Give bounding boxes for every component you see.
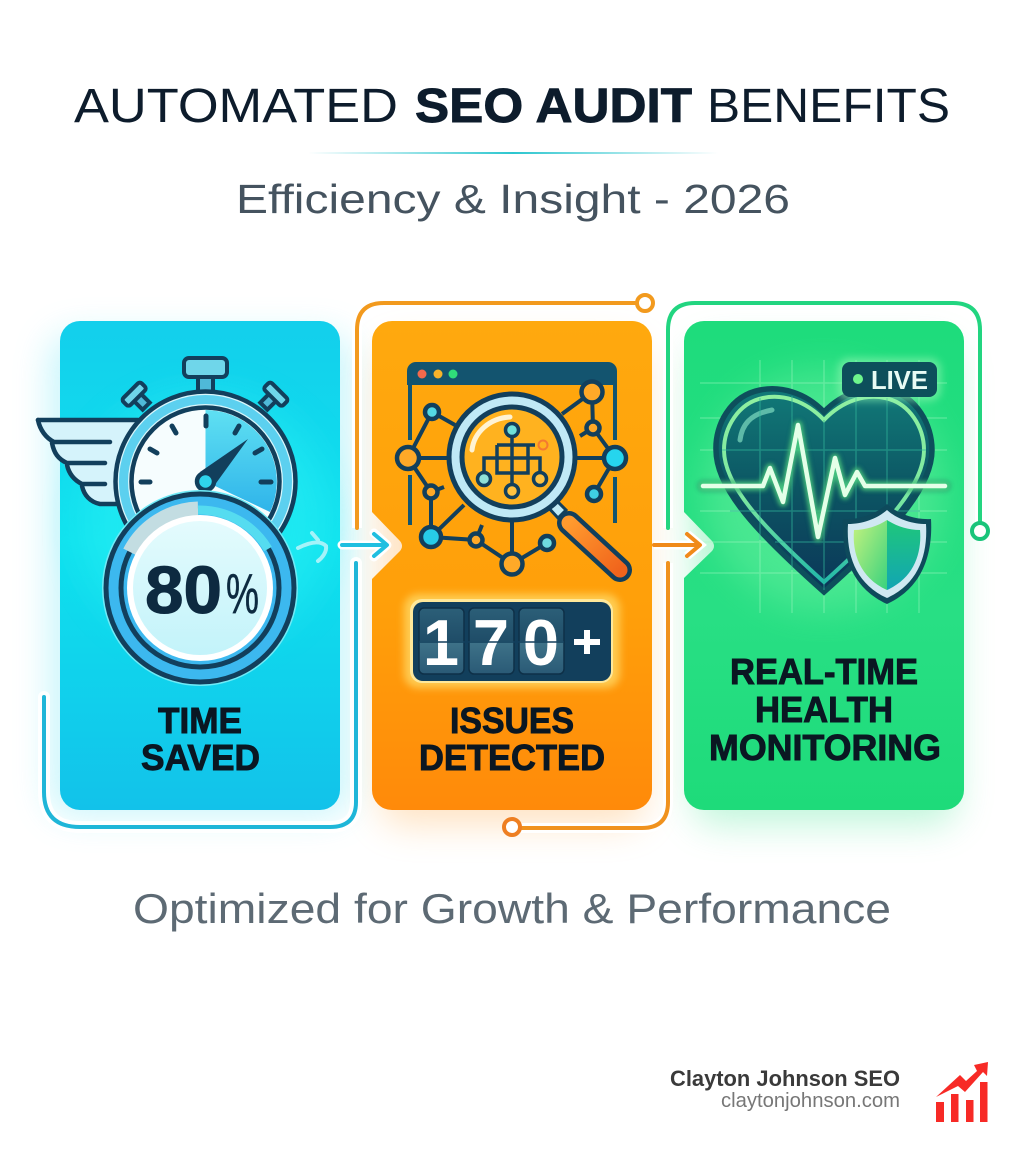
counter 170+: 0: [523, 606, 559, 679]
credit text: Clayton Johnson SEO: [670, 1066, 900, 1091]
panel glows: [50, 335, 957, 825]
connector: orange upper: [357, 295, 653, 528]
tagline: Optimized for Growth & Performance: [133, 885, 891, 932]
title: BENEFITS: [707, 80, 950, 133]
icon: logo chart: [936, 1062, 988, 1122]
label: real-time health monitoring: HEALTH: [755, 689, 893, 730]
label: issues detected: [419, 700, 605, 778]
80 percent dial: [102, 490, 298, 686]
connector: orange lower: [504, 534, 700, 835]
80 percent value: %: [226, 562, 259, 626]
label: real-time health monitoring: MONITORING: [709, 727, 941, 768]
background grid: [700, 360, 947, 613]
stopwatch ticks: [141, 416, 271, 482]
icon: heart with pulse: [703, 389, 945, 592]
panel: time saved: [38, 321, 340, 810]
stopwatch body: [116, 392, 296, 572]
counter 170+: [404, 594, 620, 688]
counter 170+: 7: [473, 606, 509, 679]
graph edges: [408, 392, 615, 564]
connector: green: [668, 303, 988, 539]
label: time saved: TIME: [158, 700, 242, 741]
pulse line: [703, 425, 945, 537]
label: issues detected: ISSUES: [450, 700, 574, 741]
graph nodes: [397, 382, 626, 574]
tree inside lens: [478, 424, 548, 498]
browser frame: [407, 362, 617, 525]
connector: blue: [44, 533, 387, 827]
stopwatch hand: [197, 439, 248, 490]
credit text: claytonjohnson.com: [721, 1090, 900, 1112]
label: issues detected: DETECTED: [419, 737, 605, 778]
heart grid: [722, 396, 926, 590]
icon: winged stopwatch: [38, 358, 298, 686]
badge: live: LIVE: [871, 365, 928, 395]
stopwatch buttons: [121, 358, 289, 415]
faded arrow: [298, 533, 326, 561]
stopwatch glow: [80, 395, 330, 645]
label: time saved: SAVED: [141, 737, 260, 778]
label: time saved: [141, 700, 260, 778]
80 percent value: [145, 553, 259, 628]
panel: issues detected: [372, 321, 652, 810]
80 percent value: 80: [145, 553, 222, 628]
icon: shield: [843, 504, 931, 604]
label: real-time health monitoring: REAL-TIME: [730, 651, 918, 692]
title: SEO AUDIT: [415, 80, 692, 133]
label: real-time health monitoring: [709, 651, 941, 768]
wing: [38, 420, 138, 505]
subtitle: Efficiency & Insight - 2026: [236, 176, 790, 222]
counter 170+: 1: [423, 606, 459, 679]
panel: real-time health monitoring: [684, 321, 964, 810]
magnifying glass: [449, 394, 620, 570]
credit text: [670, 1066, 900, 1112]
badge: live: [838, 358, 941, 401]
title: [74, 80, 950, 133]
heart glow: [704, 370, 944, 610]
title: AUTOMATED: [74, 80, 398, 133]
icon: browser window and site graph: [397, 362, 626, 574]
